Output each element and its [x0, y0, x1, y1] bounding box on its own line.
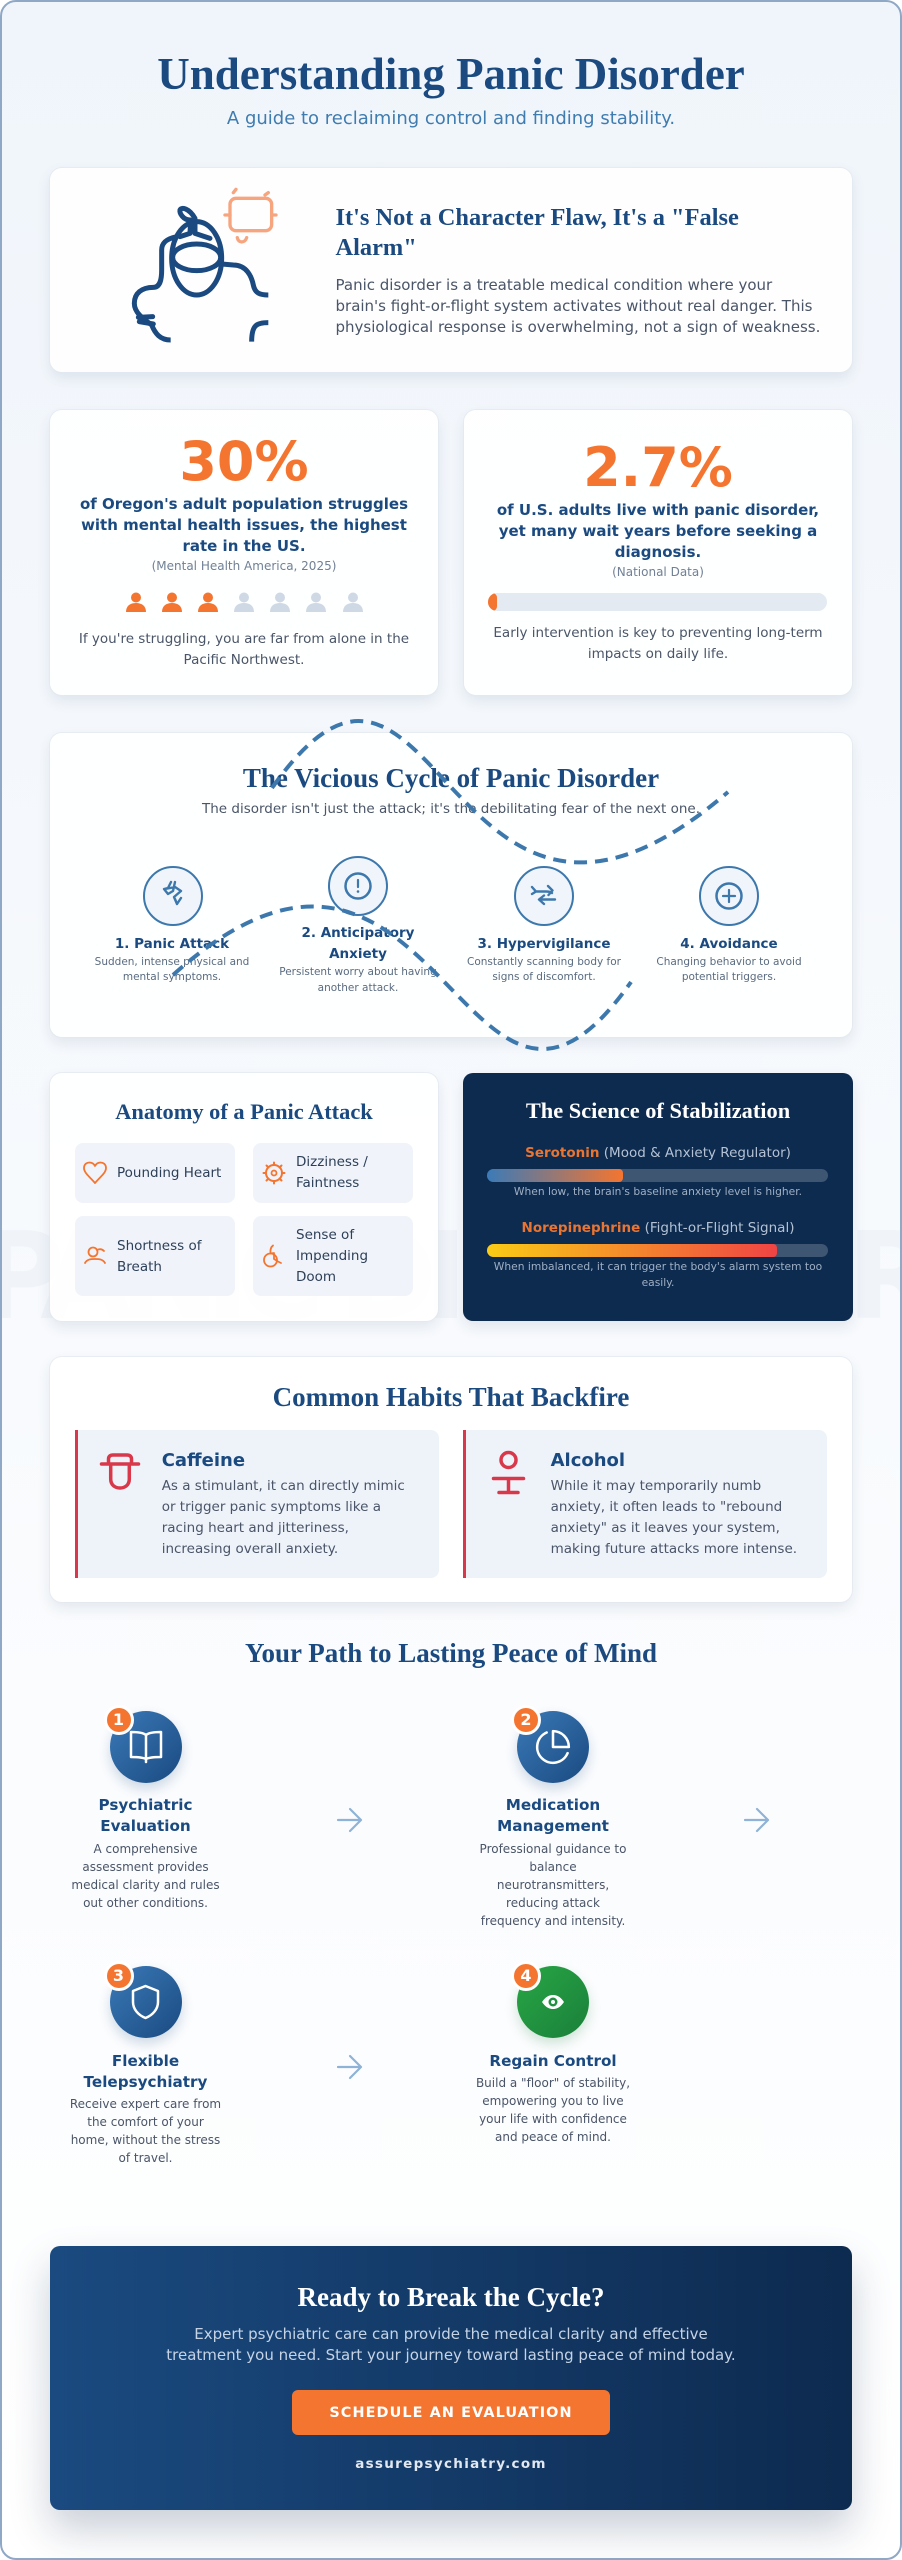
progress bar — [488, 593, 827, 611]
symptom: pounding heart — [75, 1143, 235, 1203]
stat: 2.7%: 2.7% — [583, 436, 733, 498]
description: Constantly scanning body for — [467, 956, 621, 968]
description: Receive expert care from — [70, 2097, 221, 2111]
icon: heart — [83, 1162, 107, 1184]
source: (National Data) — [612, 565, 704, 579]
heading: The Vicious Cycle of Panic Disorder — [243, 763, 659, 793]
icon circle: shield — [110, 1966, 182, 2038]
title: Flexible — [112, 2052, 179, 2070]
description: empowering you to live — [482, 2094, 624, 2108]
source: (Mental Health America, 2025) — [152, 559, 336, 573]
symptom: shortness of breath — [75, 1216, 235, 1296]
panel: national statistic — [464, 410, 852, 695]
step: medication management — [453, 1705, 653, 1955]
number badge — [511, 1705, 541, 1735]
description: Sudden, intense physical and — [95, 956, 249, 968]
description: Persistent worry about having — [279, 966, 437, 978]
description — [467, 956, 621, 983]
number badge — [104, 1705, 134, 1735]
path heading: Your Path to Lasting Peace of Mind — [245, 1638, 657, 1668]
heading: Anatomy of a Panic Attack — [115, 1099, 373, 1124]
description — [551, 1478, 797, 1557]
label: 4. Avoidance — [680, 936, 778, 952]
label: Breath — [117, 1258, 162, 1274]
panel: science of stabilization — [463, 1073, 853, 1321]
description: A comprehensive — [94, 1842, 198, 1856]
description — [45, 2095, 246, 2167]
people icon row — [126, 592, 363, 612]
heading — [336, 204, 739, 261]
stat: 30%: 30% — [179, 430, 309, 493]
icon circle: eye — [517, 1966, 589, 2038]
description: of travel. — [118, 2151, 172, 2165]
number badge: 1 — [113, 1710, 124, 1729]
label — [296, 1154, 368, 1191]
step 3 — [467, 866, 621, 983]
norepinephrine note: When imbalanced, it can trigger the body's alarm system too — [494, 1260, 822, 1273]
norepinephrine bar — [487, 1244, 828, 1257]
icon: gear — [262, 1162, 286, 1184]
description: another attack. — [318, 982, 398, 994]
icon circle: book — [110, 1711, 182, 1783]
label: 3. Hypervigilance — [477, 936, 611, 952]
step 4 — [656, 866, 802, 983]
arrow 1 — [337, 1808, 363, 1832]
paragraph: treatment you need. Start your journey toward lasting peace of mind today. — [166, 2346, 736, 2364]
icon: doom — [263, 1244, 282, 1268]
label: Pounding Heart — [117, 1164, 221, 1180]
description: your life with confidence — [479, 2112, 627, 2126]
heading: Alarm" — [336, 234, 417, 261]
title — [45, 2050, 246, 2092]
stat description: yet many wait years before seeking a — [499, 522, 817, 540]
title: Regain Control — [489, 2052, 617, 2070]
arrow 2 — [744, 1808, 770, 1832]
stat description — [80, 494, 408, 554]
serotonin label: Serotonin (Mood & Anxiety Regulator) — [525, 1145, 791, 1161]
button — [292, 2390, 610, 2435]
label: 2. Anticipatory — [302, 925, 414, 941]
step: flexible telepsychiatry — [45, 1960, 245, 2175]
description: anxiety, it often leads to "rebound — [551, 1499, 782, 1515]
dashed cycle arrows — [172, 719, 730, 1051]
subheading: The disorder isn't just the attack; it's the debilitating fear of the next one. — [202, 801, 700, 817]
title: Alcohol — [551, 1450, 625, 1470]
pie glyph — [534, 1728, 572, 1766]
description: or trigger panic symptoms like a — [162, 1499, 381, 1515]
description: out other conditions. — [83, 1896, 208, 1910]
serotonin note: When low, the brain's baseline anxiety level is higher. — [514, 1185, 802, 1198]
description: brain's fight-or-flight system activates without real danger. This — [336, 296, 812, 314]
title: Caffeine — [162, 1450, 245, 1470]
website: assurepsychiatry.com — [355, 2456, 547, 2472]
description: Panic disorder is a treatable medical condition where your — [336, 276, 772, 294]
description: physiological response is overwhelming, not a sign of weakness. — [336, 318, 820, 336]
paragraph — [50, 2324, 852, 2366]
number badge: 3 — [113, 1966, 124, 1985]
number badge: 2 — [520, 1710, 532, 1729]
title: Psychiatric — [98, 1796, 193, 1814]
description — [656, 956, 802, 983]
step 2 — [279, 856, 437, 994]
title: Medication — [506, 1796, 600, 1814]
step 1 — [95, 866, 249, 983]
stat description: with mental health issues, the highest — [81, 516, 407, 534]
description: medical clarity and rules — [71, 1878, 220, 1892]
description: frequency and intensity. — [481, 1914, 625, 1928]
icon: hypervigilance — [514, 866, 574, 926]
icon: figure — [492, 1450, 526, 1494]
plus circle glyph — [715, 882, 743, 910]
description: making future attacks more intense. — [551, 1541, 797, 1557]
title — [98, 1796, 193, 1835]
icon: panic attack — [142, 866, 202, 926]
heading: Ready to Break the Cycle? — [298, 2282, 604, 2312]
stat description: of U.S. adults live with panic disorder, — [497, 500, 819, 518]
title: Management — [497, 1817, 609, 1835]
closing note: Early intervention is key to preventing long-term — [493, 625, 823, 641]
panel: false alarm — [50, 168, 852, 372]
norepinephrine note: easily. — [642, 1276, 674, 1288]
eye glyph — [541, 1994, 565, 2010]
description — [162, 1478, 405, 1557]
panel: common habits — [50, 1357, 852, 1602]
closing note — [493, 625, 823, 662]
description — [453, 2074, 653, 2146]
description: balance — [529, 1860, 577, 1874]
icon: cup — [100, 1453, 140, 1490]
alert glyph — [344, 872, 372, 900]
label: Doom — [296, 1268, 336, 1284]
description: While it may temporarily numb — [551, 1478, 761, 1494]
closing note: impacts on daily life. — [588, 646, 728, 662]
label — [302, 925, 414, 962]
label: Anxiety — [329, 946, 387, 962]
description — [279, 966, 437, 994]
stat description: diagnosis. — [615, 542, 701, 560]
icon: alert — [328, 856, 388, 916]
heading: Common Habits That Backfire — [273, 1382, 629, 1412]
label: Faintness — [296, 1175, 359, 1191]
habit: caffeine — [75, 1430, 438, 1578]
serotonin bar — [487, 1169, 828, 1182]
description: As a stimulant, it can directly mimic — [162, 1478, 405, 1494]
zigzag glyph — [162, 880, 182, 906]
title: Evaluation — [100, 1817, 191, 1835]
book glyph — [130, 1730, 162, 1764]
label: Sense of — [296, 1226, 354, 1242]
icon: avoidance — [699, 866, 759, 926]
icon: breath — [84, 1246, 106, 1264]
description: the comfort of your — [87, 2115, 204, 2129]
paragraph: Expert psychiatric care can provide the medical clarity and effective — [194, 2325, 708, 2343]
description: and peace of mind. — [495, 2130, 611, 2144]
description: racing heart and jitteriness, — [162, 1520, 349, 1536]
icon circle: chart — [517, 1711, 589, 1783]
heading: The Science of Stabilization — [526, 1098, 790, 1123]
description — [71, 1842, 220, 1910]
call to action panel — [50, 2246, 852, 2510]
step: psychiatric evaluation — [71, 1708, 220, 1910]
description: Changing behavior to avoid — [656, 956, 802, 968]
description: Build a "floor" of stability, — [476, 2076, 630, 2090]
label: Shortness of — [117, 1238, 201, 1254]
title — [453, 1795, 653, 1837]
description: potential triggers. — [682, 971, 776, 983]
description: signs of discomfort. — [492, 971, 596, 983]
button: SCHEDULE AN EVALUATION — [329, 2405, 573, 2421]
norepinephrine note — [494, 1260, 822, 1288]
closing note: Pacific Northwest. — [184, 652, 304, 668]
label: 1. Panic Attack — [115, 936, 229, 952]
description: home, without the stress — [71, 2133, 220, 2147]
number badge: 4 — [520, 1966, 532, 1985]
description: neurotransmitters, — [497, 1878, 609, 1892]
description: increasing overall anxiety. — [162, 1541, 338, 1557]
stat description: of Oregon's adult population struggles — [80, 494, 408, 512]
habit: alcohol — [463, 1430, 827, 1578]
shield glyph — [131, 1984, 160, 2020]
stat description — [497, 500, 819, 560]
title: Telepsychiatry — [84, 2072, 207, 2090]
heading: It's Not a Character Flaw, It's a "False — [336, 204, 739, 231]
norepinephrine label: Norepinephrine (Fight-or-Flight Signal) — [522, 1220, 794, 1236]
description: Professional guidance to — [480, 1842, 626, 1856]
description: anxiety" as it leaves your system, — [551, 1520, 780, 1536]
stat description: rate in the US. — [182, 536, 306, 554]
number badge — [511, 1961, 541, 1991]
number badge — [104, 1961, 134, 1991]
description — [453, 1840, 653, 1930]
label: Dizziness / — [296, 1154, 368, 1170]
swap arrows glyph — [530, 884, 556, 906]
step: regain control — [453, 1960, 653, 2155]
label — [296, 1226, 368, 1284]
title: Understanding Panic Disorder — [157, 49, 745, 99]
description: reducing attack — [506, 1896, 600, 1910]
arrow 3 — [337, 2055, 363, 2079]
icon: head with alarm — [132, 188, 278, 342]
label: Impending — [296, 1248, 368, 1264]
label — [117, 1238, 202, 1274]
symptom: dizziness — [253, 1143, 413, 1203]
closing note — [79, 630, 409, 668]
description — [336, 276, 820, 336]
symptom: impending doom — [253, 1216, 413, 1296]
description — [95, 956, 249, 983]
panel: anatomy of a panic attack — [50, 1073, 438, 1321]
panel: Oregon statistic — [50, 410, 438, 695]
subtitle: A guide to reclaiming control and finding stability. — [227, 108, 675, 129]
panel: vicious cycle — [50, 733, 852, 1037]
closing note: If you're struggling, you are far from alone in the — [79, 630, 409, 646]
description: mental symptoms. — [123, 971, 221, 983]
description: assessment provides — [82, 1860, 209, 1874]
